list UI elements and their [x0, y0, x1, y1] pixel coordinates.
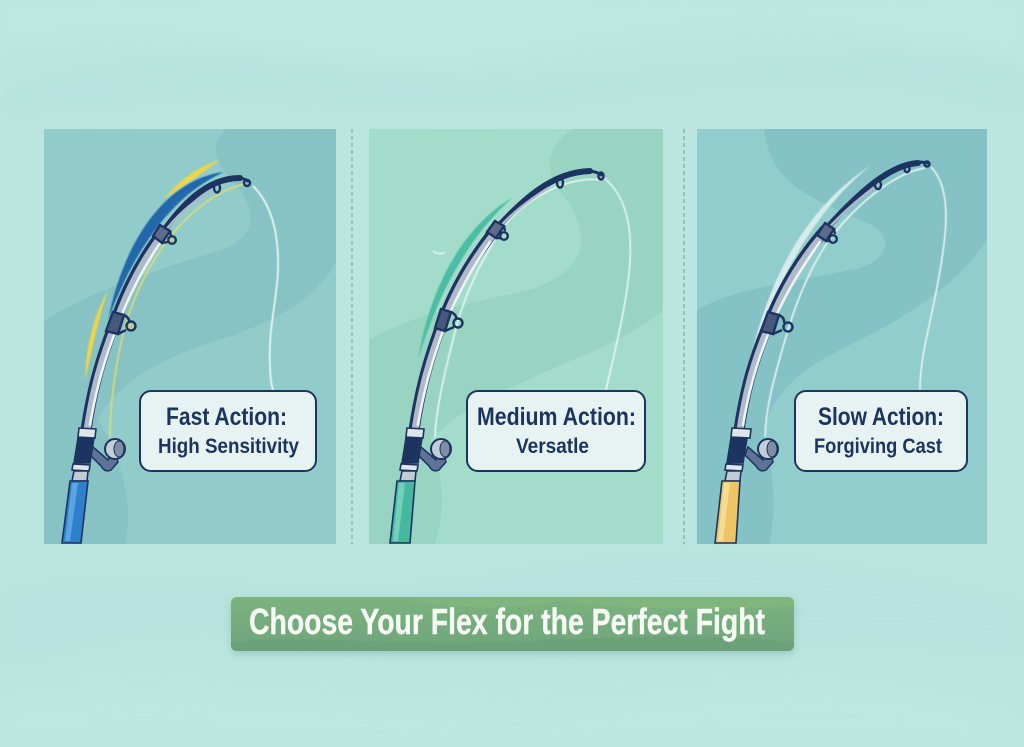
label: slow action: Forgiving Cast [814, 435, 942, 458]
flex swoosh: pale [745, 166, 946, 437]
rod blank [86, 178, 248, 430]
handle and grip [715, 428, 751, 543]
label: medium action: Versatle [516, 435, 589, 458]
label: fast action [140, 391, 316, 471]
banner: choose your flex: Choose Your Flex for the Perfect Fight [249, 601, 765, 642]
reel [745, 439, 778, 471]
label: slow action [795, 391, 967, 471]
rod: medium action [390, 171, 630, 543]
panel: slow action [697, 129, 987, 544]
label: medium action: Medium Action: [477, 403, 636, 431]
panel: fast action [44, 129, 336, 544]
flex swooshes: blue and yellow [85, 160, 278, 437]
guides [761, 162, 930, 334]
rod: slow action [715, 162, 946, 543]
rod blank [739, 162, 927, 430]
label: fast action: Fast Action: [166, 403, 287, 431]
label: slow action: Slow Action: [818, 403, 944, 431]
rod: fast action [62, 160, 278, 543]
rod blank [414, 171, 601, 430]
label: medium action [467, 391, 645, 471]
divider lines [352, 129, 684, 544]
flex swoosh: teal [418, 178, 630, 437]
label: fast action: High Sensitivity [158, 435, 299, 458]
reel [418, 439, 451, 471]
handle and grip [390, 428, 424, 543]
handle and grip [62, 428, 96, 543]
panel: medium action [369, 129, 663, 544]
guides [435, 172, 604, 331]
guides [106, 180, 250, 334]
reel [90, 439, 125, 471]
banner: choose your flex [231, 597, 794, 654]
